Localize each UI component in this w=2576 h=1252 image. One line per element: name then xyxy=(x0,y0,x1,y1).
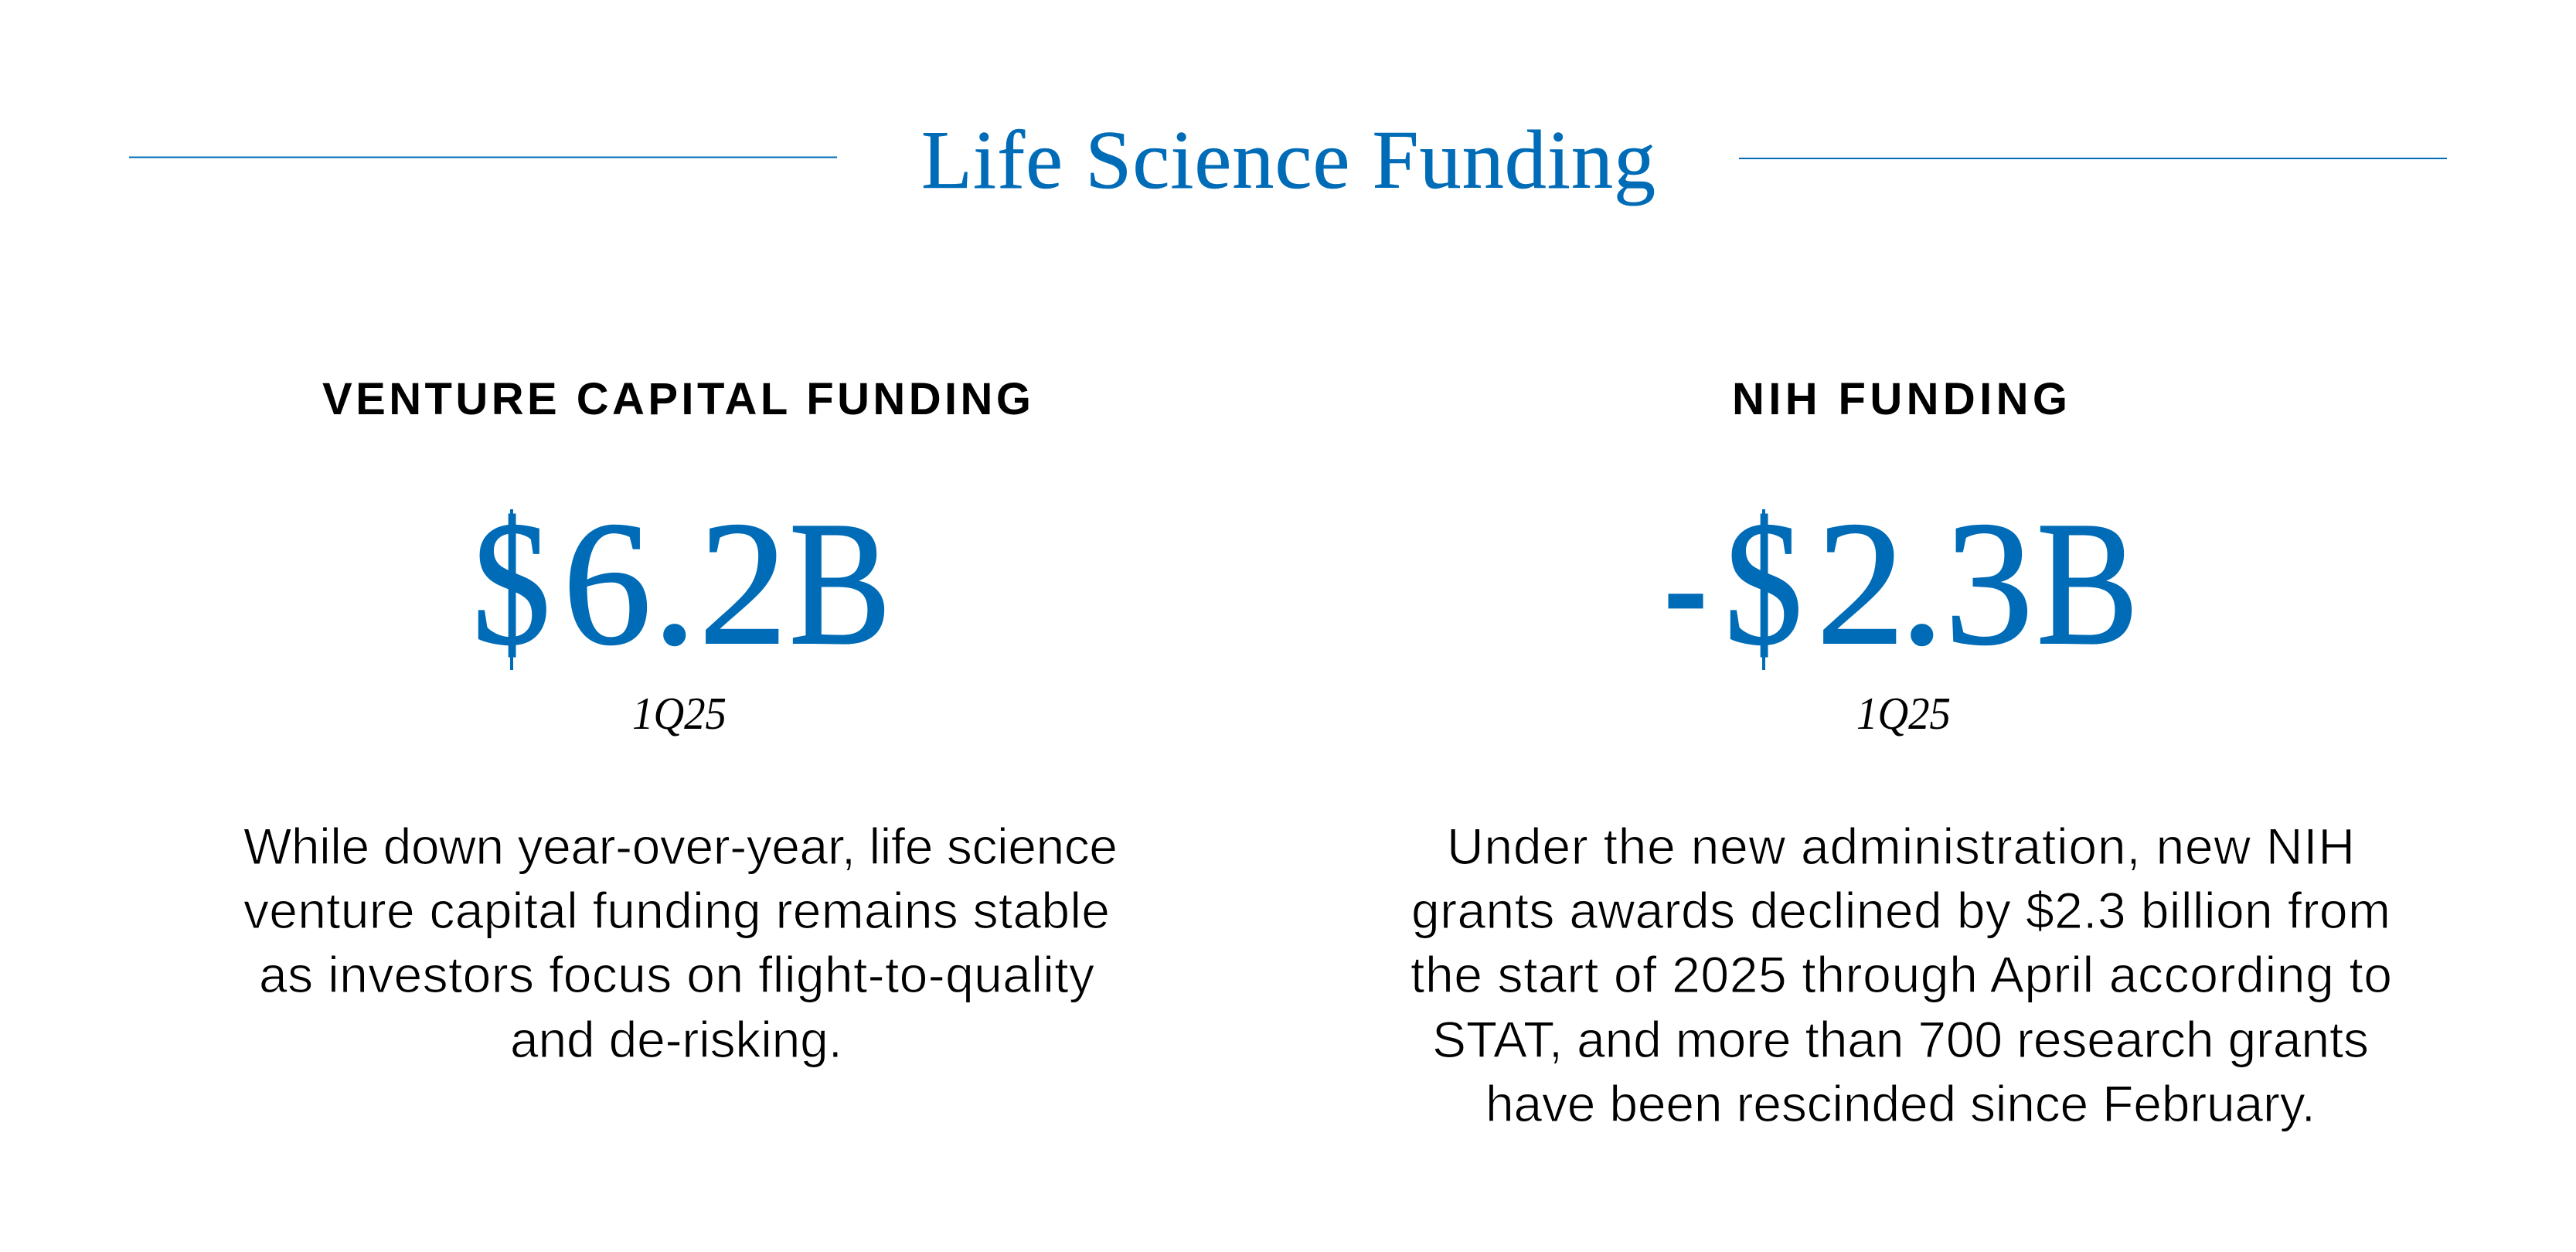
body text: venture capital: While down year-over-year, life science xyxy=(243,818,1118,875)
big number: -$2.3B: $ xyxy=(1724,485,1802,682)
body text: NIH xyxy=(1411,818,2392,1132)
body text: venture capital: and de-risking. xyxy=(510,1011,842,1068)
big number: $6.2B: 6.2 xyxy=(563,485,788,682)
body text: venture capital xyxy=(243,818,1118,1068)
body text: NIH: the start of 2025 through April according to xyxy=(1411,946,2392,1003)
period label: 1Q25: 1Q25 xyxy=(1856,688,1951,739)
title: Life Science Funding xyxy=(921,114,1656,206)
period label: 1Q25: 1Q25 xyxy=(632,688,727,739)
heading: NIH funding: NIH FUNDING xyxy=(1732,374,2067,424)
body text: NIH: grants awards declined by $2.3 billion from xyxy=(1411,882,2391,939)
heading: venture capital funding: VENTURE CAPITAL FUNDING xyxy=(322,374,1031,424)
big number: -$2.3B xyxy=(1664,485,2139,682)
big number: $6.2B xyxy=(472,485,891,682)
body text: venture capital: as investors focus on flight-to-quality xyxy=(259,946,1094,1003)
body text: venture capital: venture capital funding remains stable xyxy=(243,882,1110,939)
big number: $6.2B: $ xyxy=(472,485,550,682)
panel: NIH funding xyxy=(1411,374,2392,1132)
body text: NIH: have been rescinded since February. xyxy=(1485,1075,2316,1132)
big number: $6.2B: B xyxy=(789,485,891,682)
big number: -$2.3B: B xyxy=(2037,485,2139,682)
body text: NIH: Under the new administration, new NIH xyxy=(1447,818,2355,875)
big number: -$2.3B: 2.3 xyxy=(1816,485,2033,682)
panel: venture capital funding xyxy=(243,374,1118,1068)
body text: NIH: STAT, and more than 700 research grants xyxy=(1432,1011,2369,1068)
big number: -$2.3B: - xyxy=(1664,485,1707,682)
